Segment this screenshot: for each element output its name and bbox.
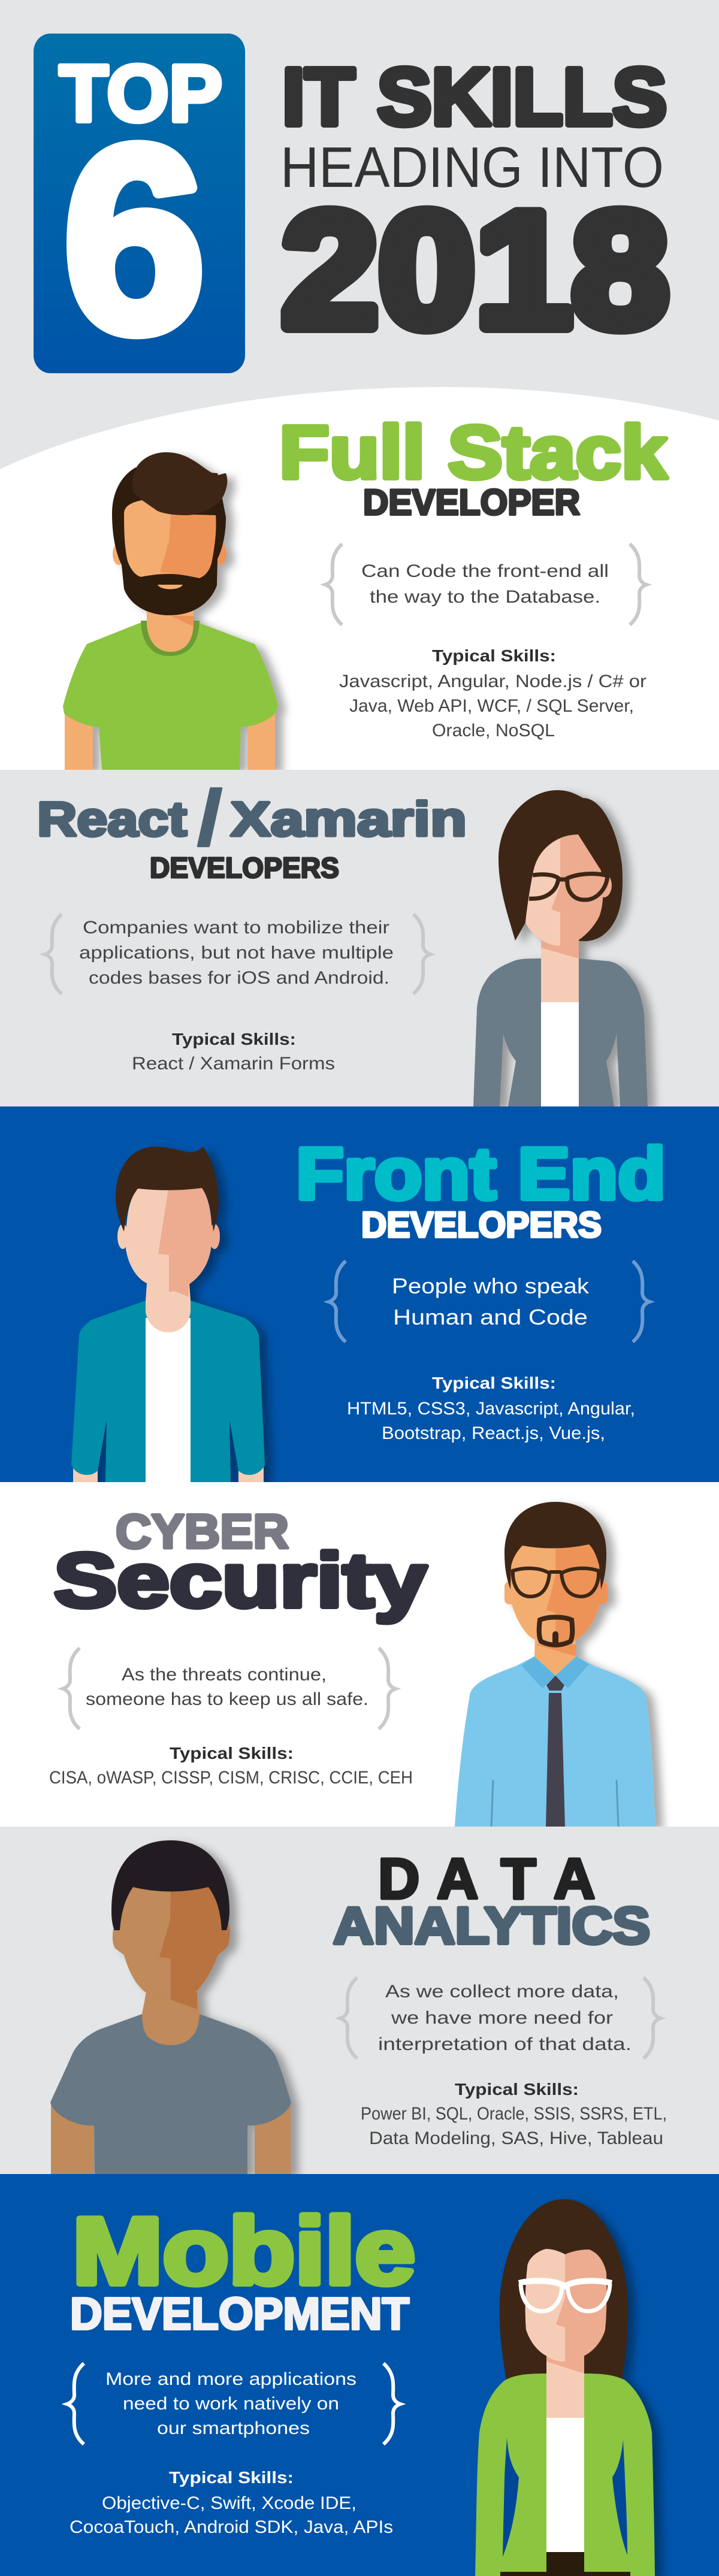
title: IT SKILLS: [282, 52, 667, 142]
skills: mobile development: Typical Skills:: [169, 2468, 294, 2487]
skills: data analytics: [361, 2080, 667, 2148]
heading: front end: [296, 1133, 666, 1245]
skills: front end: [347, 1374, 635, 1443]
skills: mobile development: Objective-C, Swift, Xcode IDE,: [102, 2493, 357, 2513]
skills: data analytics: Power BI, SQL, Oracle, SSIS, SSRS, ETL,: [361, 2104, 667, 2124]
heading: full stack: [279, 411, 667, 522]
skills: mobile development: CocoaTouch, Android SDK, Java, APIs: [70, 2517, 393, 2537]
heading: full stack: Full Stack: [279, 411, 667, 494]
description: full stack: [325, 544, 647, 625]
skills: mobile development: [70, 2468, 393, 2537]
heading: mobile development: DEVELOPMENT: [70, 2288, 409, 2339]
description: mobile development: need to work natively on: [123, 2394, 339, 2414]
description: mobile development: More and more applications: [105, 2369, 357, 2389]
badge: top 6: 6: [63, 91, 206, 387]
badge: top 6: [34, 34, 245, 387]
heading: front end: DEVELOPERS: [361, 1205, 602, 1245]
panel: react xamarin developers: [0, 770, 719, 1106]
figure: man in teal jacket: [71, 1147, 265, 1482]
skills: data analytics: Data Modeling, SAS, Hive, Tableau: [369, 2128, 663, 2148]
description: full stack: the way to the Database.: [370, 587, 600, 607]
description: cyber security: As the threats continue,: [122, 1665, 327, 1685]
description: data analytics: we have more need for: [391, 2008, 613, 2028]
panel: mobile development: [0, 2174, 719, 2576]
description: mobile development: our smartphones: [157, 2418, 310, 2438]
description: react xamarin: [45, 914, 430, 994]
description: data analytics: As we collect more data,: [385, 1982, 619, 2001]
description: front end: [329, 1261, 649, 1342]
description: mobile development: [67, 2363, 400, 2444]
heading: react xamarin: React: [37, 793, 187, 846]
heading: data analytics: [333, 1847, 650, 1955]
description: cyber security: someone has to keep us all safe.: [86, 1689, 368, 1709]
title: [280, 52, 669, 362]
heading: front end: Front End: [296, 1133, 666, 1214]
skills: cyber security: [49, 1744, 413, 1788]
heading: cyber security: Security: [54, 1538, 427, 1623]
skills: full stack: Oracle, NoSQL: [432, 721, 555, 740]
heading: react xamarin: Xamarin: [231, 793, 467, 846]
heading: react xamarin: DEVELOPERS: [150, 852, 339, 884]
skills: front end: Typical Skills:: [432, 1374, 556, 1392]
panel: front end developers: [0, 1106, 719, 1482]
skills: cyber security: CISA, oWASP, CISSP, CISM, CRISC, CCIE, CEH: [49, 1768, 413, 1788]
title: HEADING INTO: [280, 135, 664, 199]
skills: react xamarin: React / Xamarin Forms: [132, 1054, 335, 1074]
skills: full stack: Java, Web API, WCF, / SQL Server,: [349, 696, 634, 716]
title: 2018: [282, 179, 669, 362]
panel: full stack developer: [0, 387, 719, 770]
description: full stack: Can Code the front-end all: [361, 561, 609, 581]
figure: man in grey t-shirt: [50, 1840, 291, 2174]
panel: cyber security: [0, 1482, 719, 1827]
skills: full stack: Javascript, Angular, Node.js / C# or: [339, 672, 647, 691]
header panel: [0, 0, 719, 479]
heading: mobile development: [70, 2199, 415, 2339]
heading: react xamarin: [37, 774, 467, 884]
skills: full stack: [339, 646, 647, 740]
skills: front end: Bootstrap, React.js, Vue.js,: [382, 1423, 605, 1443]
skills: front end: HTML5, CSS3, Javascript, Angular,: [347, 1399, 635, 1419]
heading: data analytics: DATA: [378, 1847, 595, 1911]
figure: woman with white glasses: [475, 2199, 655, 2576]
figure: bearded man: [63, 452, 278, 770]
heading: cyber security: CYBER: [116, 1505, 289, 1559]
panel: data analytics: [0, 1827, 719, 2174]
skills: react xamarin: [132, 1030, 335, 1074]
description: cyber security: [63, 1648, 395, 1729]
skills: cyber security: Typical Skills:: [170, 1744, 294, 1762]
skills: full stack: Typical Skills:: [432, 646, 556, 665]
skills: data analytics: Typical Skills:: [455, 2080, 579, 2099]
skills: react xamarin: Typical Skills:: [172, 1030, 296, 1048]
description: react xamarin: codes bases for iOS and Android.: [89, 968, 389, 988]
heading: full stack: DEVELOPER: [363, 482, 580, 522]
heading: react xamarin: /: [197, 774, 222, 861]
heading: mobile development: Mobile: [72, 2199, 415, 2304]
description: data analytics: interpretation of that data.: [378, 2034, 632, 2054]
description: front end: People who speak: [392, 1274, 590, 1298]
badge: top 6: TOP: [59, 49, 222, 138]
heading: cyber security: [54, 1505, 427, 1623]
description: data analytics: [340, 1978, 660, 2058]
figure: man with shirt and tie: [455, 1502, 655, 1827]
description: react xamarin: Companies want to mobilize their: [83, 918, 389, 938]
figure: woman with dark glasses: [473, 790, 648, 1106]
description: front end: Human and Code: [393, 1305, 588, 1329]
heading: data analytics: ANALYTICS: [333, 1897, 650, 1955]
description: react xamarin: applications, but not have multiple: [79, 943, 394, 963]
